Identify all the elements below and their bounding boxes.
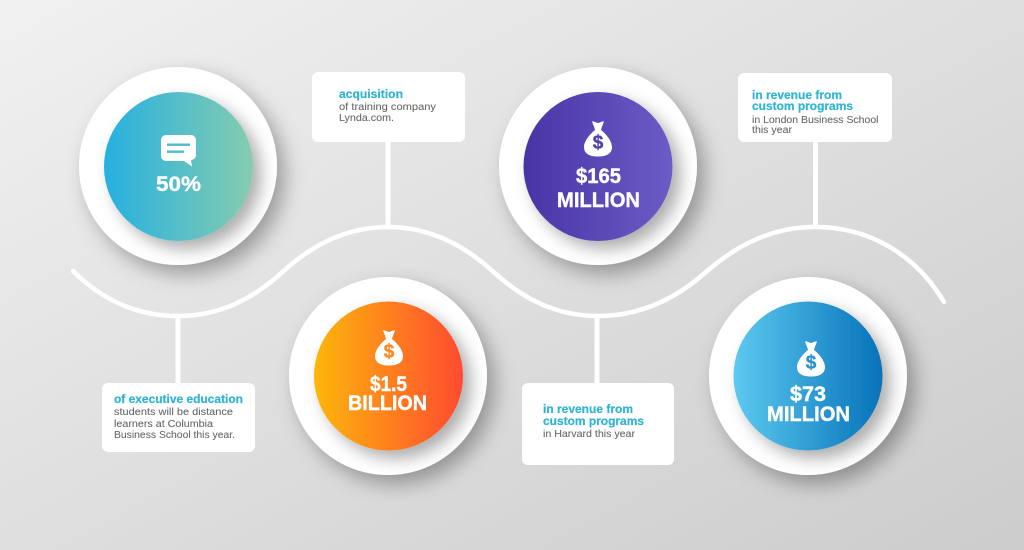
stat: $1.5 billion: $1.5 [370,373,407,396]
callout: London Business School revenue: in London Business School [752,115,878,126]
callout: executive education: students will be distance [114,407,233,418]
callout: London Business School revenue: this year [752,125,793,136]
stat: $165 million: $165 [576,165,621,188]
icon: speech bubble [161,135,196,166]
icon: money bag [584,121,612,156]
connector: London Business School [813,140,818,227]
callout: acquisition: Lynda.com. [339,113,394,124]
callout: London Business School revenue: custom programs [752,101,853,113]
icon: money bag [375,330,403,366]
timeline curve [73,227,944,316]
callout: acquisition: acquisition [339,89,403,101]
stat: $73 million: $73 [790,383,826,406]
connector: acquisition [386,140,390,227]
stat: $165 million [557,165,640,212]
callout: London Business School revenue [738,73,892,142]
panel: $73 million circle [709,277,907,475]
callout: executive education: Business School this year. [114,430,235,441]
callout: Harvard revenue: in Harvard this year [543,429,636,440]
stat: $73 million: MILLION [767,403,850,426]
callout: executive education [102,383,255,452]
callout: Harvard revenue: custom programs [543,416,644,428]
callout: acquisition: of training company [339,102,436,113]
callout: Harvard revenue [522,383,674,465]
stat: $165 million: MILLION [557,189,640,212]
stat: 50%: 50% [156,173,201,196]
panel: 50% circle [79,67,277,265]
callout: executive education: of executive education [114,394,243,406]
panel: $165 million circle [499,67,697,265]
connector: Harvard [594,316,600,385]
icon: money bag: $ [384,342,395,362]
icon: money bag [797,341,825,376]
stat: $1.5 billion [348,373,427,415]
callout: London Business School revenue: in revenue from [752,90,842,102]
stat: $73 million [767,383,850,426]
icon: money bag: $ [593,132,604,154]
stat: $1.5 billion: BILLION [348,392,427,415]
callout: executive education: learners at Columbia [114,419,213,430]
callout: acquisition [312,72,465,142]
callout: Harvard revenue: in revenue from [543,404,633,416]
icon: money bag: $ [806,352,817,374]
panel: $1.5 billion circle [289,277,487,475]
connector: executive education [176,316,180,385]
